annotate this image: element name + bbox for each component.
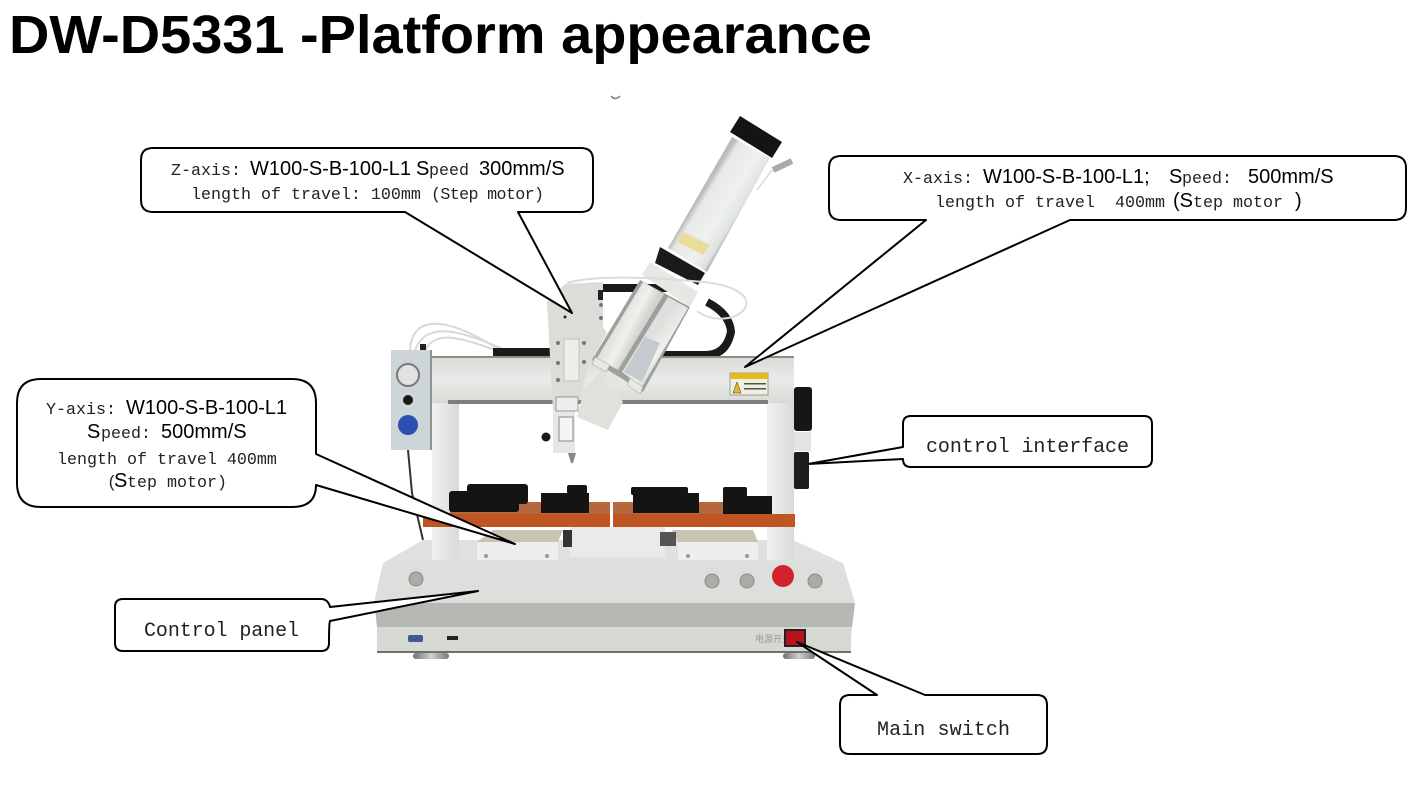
base front [374,563,855,652]
callout: Z-axis: (Step motor) [431,186,544,205]
power switch [784,629,806,647]
callout: X-axis: 400mm [1115,194,1165,213]
callout: X-axis: 500mm/S [1248,166,1334,188]
callout: Z-axis: S [416,158,429,180]
callout: X-axis: W100-S-B-100-L1; [983,166,1150,188]
callout: Y-axis: 500mm/S [161,421,247,443]
callout: Y-axis: S [114,470,127,492]
mid clamp [655,247,705,285]
callout: control interface [808,416,1152,467]
callout: Main switch [797,642,1047,754]
columns [432,400,459,560]
callout: Y-axis: Y-axis: [46,401,116,420]
Y sliders [477,530,758,560]
callout: X-axis: S [1169,166,1182,188]
base top surface [383,540,843,563]
base mid band [375,603,855,627]
callout: Y-axis [17,379,515,544]
Z axis plate [547,282,607,410]
X beam [432,357,794,403]
dispensing head [542,397,578,463]
small mark [611,96,620,98]
base lower band [377,627,851,652]
ports [408,635,458,642]
callout: Y-axis: ( [107,474,117,493]
cylinder label [678,232,710,255]
switch label: 电源开关 [755,633,791,644]
callout: Y-axis: peed: [101,425,151,444]
callout: X-axis: length of travel [935,194,1095,213]
lower cylinders [592,280,690,392]
callout: Z-axis: 300mm/S [479,158,565,180]
callout: X-axis [745,156,1406,367]
pressure box [391,344,432,450]
callout: Z-axis: length of travel: 100mm [191,186,421,205]
cable chain [493,288,731,355]
air fitting [773,161,792,170]
white plate [642,262,698,307]
back cables [410,324,505,350]
tray tops [450,502,610,514]
machine photo illustration [374,116,855,659]
upper cylinder [668,137,770,272]
callout: Y-axis: length of travel 400mm [57,451,277,470]
panel buttons [409,565,822,588]
callout: control interface: control interface [926,436,1129,459]
callout: X-axis: (S [1173,190,1193,212]
title: DW-D5331 -Platform appearance [9,5,872,65]
cable to base [408,450,423,540]
callout: Z-axis: Z-axis: [171,162,241,181]
callout: X-axis: ) [1295,190,1302,212]
pendant [794,387,812,489]
callout: Control panel [115,591,478,651]
black fixtures [449,484,772,514]
callout: Y-axis: S [87,421,100,443]
callout: Main switch: Main switch [877,719,1010,742]
callout: Y-axis: tep motor) [127,474,227,493]
callout: X-axis: peed: [1182,170,1232,189]
orange tray fronts [423,514,610,527]
white air tube loop [567,278,747,319]
feet [413,653,449,659]
callout: X-axis: X-axis: [903,170,973,189]
warning label [730,373,768,395]
callout: Control panel: Control panel [144,620,299,643]
callout: X-axis: tep motor [1193,194,1283,213]
callout: Z-axis [141,148,593,313]
tilted bracket [577,367,623,430]
cylinder cap [730,116,782,158]
nozzle fitting [605,375,619,389]
bottom caps [592,357,610,372]
callout: Z-axis: W100-S-B-100-L1 [250,158,411,180]
callout: Y-axis: W100-S-B-100-L1 [126,397,287,419]
callout: Z-axis: peed [429,162,469,181]
